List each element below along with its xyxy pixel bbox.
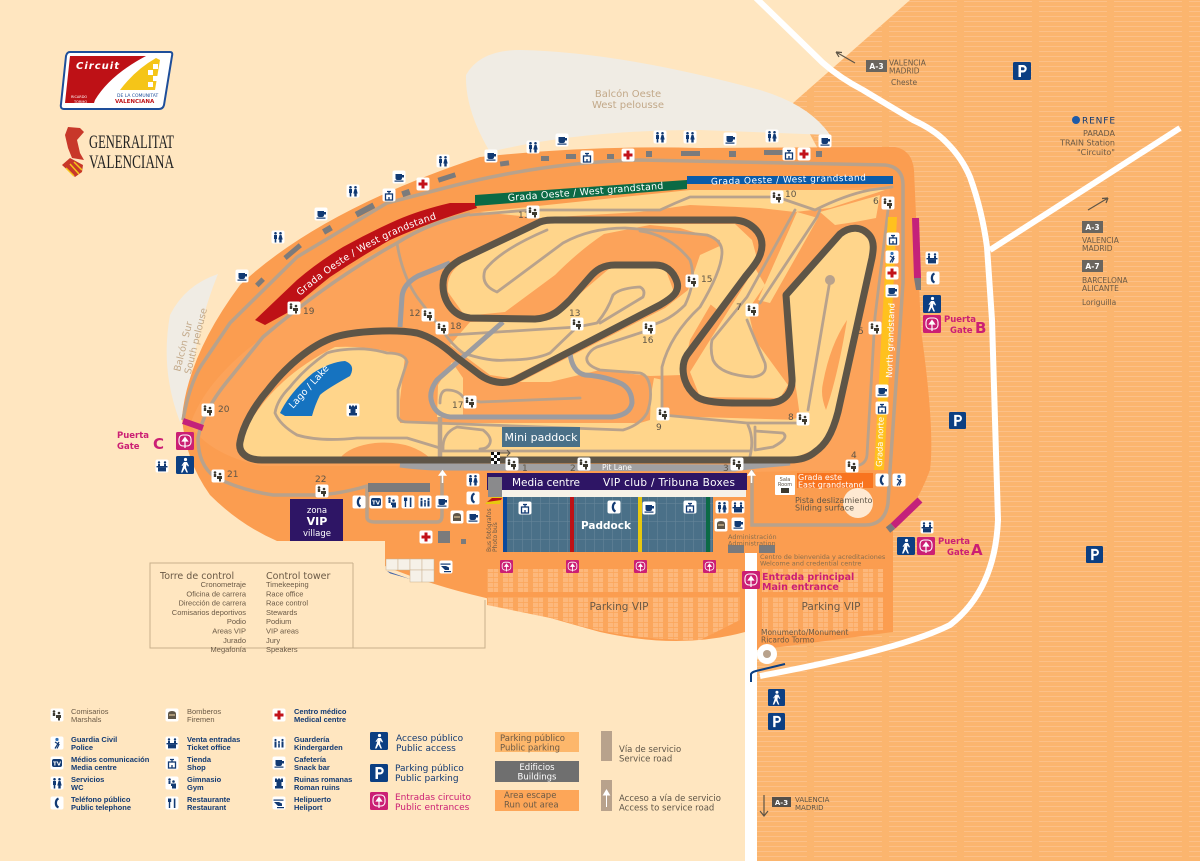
road: top inner road	[470, 187, 892, 215]
legend: small icons	[50, 707, 352, 812]
logo: Circuit de la Comunitat Valenciana: Circuit	[76, 61, 120, 72]
legend item: roman ruins: Roman ruins	[294, 783, 340, 792]
road: marshal 6	[855, 210, 888, 466]
logo: Circuit de la Comunitat Valenciana: TORMO	[73, 100, 87, 104]
legend item: medical: Centro médico	[294, 707, 347, 716]
legend item: kindergarten	[272, 735, 343, 752]
gate A bar	[888, 500, 920, 530]
grass: top straight strip	[640, 224, 758, 312]
legend item: kindergarten: Guardería	[294, 735, 330, 744]
grandstand: west green	[475, 180, 687, 206]
legend item: public parking	[370, 764, 464, 784]
heliport apron	[387, 571, 447, 606]
sign: RENFE station: "Circuito"	[1077, 148, 1115, 157]
panel: infield run-off base	[190, 186, 890, 472]
marshal post numbers: 22	[315, 475, 326, 485]
text: control tower list: Speakers	[266, 645, 298, 654]
text: control tower list: Stewards	[266, 608, 298, 617]
grass: diagonal strip	[758, 212, 818, 303]
gate A: A	[971, 541, 983, 559]
road: infield service roads	[275, 187, 892, 466]
flag: start finish	[491, 450, 510, 464]
pole: red paddock divider	[570, 497, 574, 552]
text: control tower list: Timekeeping	[266, 580, 309, 589]
legend item: marshals: Marshals	[71, 715, 102, 724]
label: mini paddock: Mini paddock	[505, 431, 578, 444]
label: lake: Lago / Lake	[287, 363, 332, 411]
icons: west perimeter services	[236, 130, 832, 282]
building: small squares at heliport	[386, 559, 434, 582]
text: torre de control list: Podio	[227, 617, 246, 626]
legend item: marshals	[50, 707, 109, 724]
label: monument: Monumento/Monument	[761, 628, 849, 637]
road: grey access roads	[400, 263, 632, 417]
text: torre de control list: Jurado	[223, 636, 246, 645]
arrow: pit service left	[440, 471, 446, 483]
sign: A-3 and A-7 destinations: MADRID	[1082, 244, 1113, 253]
legend item: roman ruins: Ruinas romanas	[294, 775, 352, 784]
sign: RENFE station: PARADA	[1083, 129, 1116, 138]
heading: control tower: Control tower	[266, 571, 331, 582]
legend item: snack bar: Snack bar	[294, 763, 330, 772]
zona VIP village	[290, 499, 343, 541]
road: bottom straight	[440, 450, 750, 452]
legend item: public access	[370, 732, 464, 754]
sign: A-3 and A-7 destinations: Loriguilla	[1082, 298, 1116, 307]
label: west grandstand: Grada Oeste / West grandstand	[297, 212, 436, 294]
lake	[280, 361, 352, 416]
text: control tower list: Jury	[266, 636, 280, 645]
sign: A-3 and A-7 destinations: BARCELONA	[1082, 276, 1129, 285]
road: bottom small loop	[443, 427, 490, 450]
grandstand: west red	[255, 203, 477, 325]
road: south ring road	[198, 214, 470, 522]
marshal post numbers	[218, 190, 879, 485]
gate C: Puerta	[117, 431, 149, 441]
zona VIP village: village	[303, 529, 331, 539]
grass: middle S area	[450, 268, 674, 378]
marshal post numbers: 9	[656, 423, 662, 433]
label: main entrance: Entrada principal	[762, 572, 854, 583]
marshal post numbers: 6	[873, 197, 879, 207]
legend: access types	[370, 732, 472, 813]
legend item: gym: Gimnasio	[187, 775, 222, 784]
logo: Generalitat Valenciana: GENERALITAT	[89, 132, 174, 153]
grass: east loop	[787, 228, 872, 457]
legend item: police	[50, 735, 117, 752]
legend item: run out	[495, 790, 579, 811]
sign: A-3 south: MADRID	[795, 804, 824, 812]
legend item: gym	[166, 775, 222, 792]
logo: Circuit de la Comunitat Valenciana: VALENCIANA	[115, 99, 155, 105]
road: upper loop inner	[484, 228, 722, 413]
heading: west pelouse: West pelousse	[592, 100, 664, 111]
legend item: shop: Tienda	[187, 755, 212, 764]
grass: upper loop	[448, 222, 655, 316]
legend: roads	[601, 731, 721, 814]
text: control tower list: Race office	[266, 589, 303, 598]
sign: A-3 south	[760, 795, 830, 816]
legend item: police: Police	[71, 743, 93, 752]
text: torre de control list: Areas VIP	[212, 626, 246, 636]
zona VIP village: VIP	[307, 515, 327, 528]
parking VIP east	[762, 569, 883, 635]
legend item: access to service road	[601, 780, 721, 814]
label: paddock: Paddock	[581, 520, 632, 532]
legend item: medical	[272, 707, 347, 724]
sign: A-3 Valencia Madrid Cheste: VALENCIA	[889, 58, 927, 68]
panel: infield grass	[241, 190, 885, 458]
paddock	[503, 497, 713, 552]
legend item: toilets: Servicios	[71, 775, 104, 784]
label: grada norte: Grada norte	[875, 417, 887, 467]
legend item: restaurant: Restaurant	[187, 803, 227, 812]
label: north grandstand: North grandstand	[885, 303, 898, 378]
road: main white road	[756, 0, 998, 676]
legend item: media	[50, 755, 150, 772]
label: welcome centre: Centro de bienvenida y acreditaciones	[760, 553, 886, 561]
legend item: telephone: Public telephone	[71, 803, 131, 812]
sliding surface	[795, 488, 873, 518]
icons: paddock services	[518, 500, 744, 532]
building: media and VIP bar	[487, 473, 747, 490]
logo: Generalitat Valenciana: VALENCIANA	[89, 152, 174, 173]
icons: marshal posts	[202, 190, 894, 498]
road: marshal 17 spur	[440, 390, 580, 403]
legend item: run out: Area escape	[504, 791, 556, 801]
marshal post numbers: 11	[518, 211, 529, 221]
sign: A-3 and A-7 destinations: ALICANTE	[1082, 284, 1119, 293]
legend item: shop: Shop	[187, 763, 206, 772]
building: control tower	[485, 477, 502, 504]
grandstand: north yellow	[874, 217, 898, 470]
marshal post numbers: 10	[785, 190, 797, 200]
legend item: service road: Service road	[619, 754, 672, 764]
marshal post numbers: 21	[227, 470, 238, 480]
legend item: restaurant: Restaurante	[187, 795, 230, 804]
pole: green paddock divider	[706, 497, 710, 552]
grass: under the S	[520, 245, 725, 382]
label: pit lane: Pit Lane	[602, 463, 632, 472]
heading: south pelouse: South pelouse	[183, 307, 210, 375]
legend item: ticket office: Venta entradas	[187, 735, 240, 744]
label: press bus: Bus fotógrafos	[486, 508, 493, 552]
building: admin bars	[728, 545, 775, 553]
grandstand: west blue	[687, 173, 893, 187]
monument circle	[757, 644, 777, 664]
sign: A-3 and A-7 destinations	[1082, 198, 1129, 307]
sign: A-3 and A-7 destinations: A-3	[1085, 223, 1100, 232]
label: administration: Administración	[728, 533, 777, 541]
icon: main entrance	[742, 571, 760, 589]
heading: torre de control: Torre de control	[159, 571, 234, 582]
grass: lake area and south band	[241, 347, 800, 458]
marshal post numbers: 5	[858, 327, 864, 337]
box: sala room: Sala	[780, 477, 790, 483]
legend item: buildings	[495, 761, 579, 782]
label: VIP club: VIP club / Tribuna Boxes	[603, 477, 735, 489]
legend item: restaurant	[166, 795, 230, 812]
legend item: police: Guardia Civil	[71, 735, 117, 744]
legend item: buildings: Edificios	[519, 763, 555, 773]
building: pit garages white strip	[502, 490, 746, 497]
grass: top band	[480, 190, 885, 218]
legend item: medical: Medical centre	[294, 715, 346, 724]
legend item: public access: Acceso público	[396, 734, 464, 744]
heading: south pelouse: Balcón Sur	[172, 320, 195, 373]
legend item: heliport	[272, 795, 332, 812]
marshal post numbers: 15	[701, 275, 712, 285]
legend item: snack bar: Cafetería	[294, 755, 327, 764]
text: torre de control list: Comisarios deportivos	[172, 608, 246, 617]
legend item: ticket office: Ticket office	[187, 743, 231, 752]
road: pit access vertical	[438, 417, 442, 466]
legend item: firemen: Firemen	[187, 715, 215, 724]
label: administration: Administration	[728, 540, 776, 548]
label: media centre: Media centre	[512, 477, 580, 489]
marshal post numbers: 16	[642, 336, 654, 346]
sign: A-3 Valencia Madrid Cheste: A-3	[869, 62, 884, 71]
label: press bus: Photo bus	[492, 522, 499, 552]
parking VIP west	[487, 569, 740, 640]
marshal post numbers: 19	[303, 307, 315, 317]
gate B	[923, 252, 986, 337]
road: turn seven inner	[711, 210, 820, 377]
panel: public parking area east	[757, 0, 1200, 861]
gate C: C	[153, 435, 164, 453]
legend item: public entrances: Public entrances	[395, 803, 470, 813]
marshal post numbers: 8	[788, 413, 794, 423]
text: control tower list: Race control	[266, 599, 308, 608]
arrow: access road	[751, 664, 785, 682]
grandstand: east orange	[797, 473, 873, 490]
marshal post numbers: 3	[723, 464, 729, 474]
icons: public parking markers	[949, 62, 1103, 563]
legend item: access to service road: Acceso a vía de servicio	[619, 794, 721, 804]
road: small hairpin	[577, 287, 644, 327]
legend item: snack bar	[272, 755, 330, 772]
road: lower S	[397, 243, 577, 360]
text: torre de control list: Cronometraje	[201, 580, 246, 589]
sign: RENFE station: RENFE	[1082, 116, 1115, 126]
legend item: gym: Gym	[187, 783, 204, 792]
road: round loop at fifteen	[640, 231, 693, 325]
gate B: Puerta	[944, 315, 976, 325]
outbuildings along west perimeter	[255, 150, 822, 287]
legend item: roman ruins	[272, 775, 352, 792]
text: torre de control list: Oficina de carrera	[186, 589, 247, 598]
label: sliding surface: Sliding surface	[795, 504, 854, 512]
legend item: public entrances	[370, 792, 472, 813]
marshal post numbers: 13	[569, 309, 580, 319]
label: monument: Ricardo Tormo	[761, 636, 815, 644]
gate A	[897, 520, 983, 559]
gate B: B	[975, 319, 986, 337]
legend item: access to service road: Access to service road	[619, 804, 714, 814]
road: lake loop	[275, 349, 440, 448]
legend item: firemen	[166, 707, 221, 724]
grass: loop around seventeen	[437, 362, 463, 417]
panel: west pelouse	[466, 50, 830, 152]
gate B bar	[912, 218, 921, 290]
icons: access south	[768, 689, 785, 730]
icons: VIP parking entrances	[500, 560, 716, 573]
sign: A-3 Valencia Madrid Cheste: Cheste	[891, 78, 917, 87]
legend item: run out: Run out area	[504, 800, 559, 810]
gate C	[117, 431, 194, 474]
label: welcome centre: Welcome and credential centre	[760, 560, 861, 568]
legend item: parking area: Public parking	[500, 744, 560, 754]
legend item: heliport: Heliport	[294, 803, 323, 812]
sign: A-3 and A-7 destinations: VALENCIA	[1082, 236, 1120, 245]
legend item: firemen: Bomberos	[187, 707, 221, 716]
road: outer service road	[183, 160, 903, 525]
label: west grandstand blue: Grada Oeste / West grandstand	[711, 173, 866, 187]
legend item: telephone: Teléfono público	[71, 795, 131, 804]
legend item: media: Médios comunicación	[71, 755, 150, 764]
legend item: service road	[601, 731, 681, 764]
gate A: Puerta	[938, 537, 970, 547]
logo: Circuit de la Comunitat Valenciana	[61, 52, 172, 109]
legend item: parking area	[495, 732, 579, 754]
track: pit lane	[400, 462, 790, 468]
legend item: toilets	[50, 775, 104, 792]
road: east branch	[990, 128, 1180, 250]
box: sala room	[775, 475, 795, 495]
marshal post numbers: 4	[851, 451, 857, 461]
grass: north top patch	[820, 195, 880, 225]
text: torre de control list: Dirección de carrera	[178, 599, 247, 608]
sign: RENFE station	[1059, 116, 1116, 157]
icon: roman ruins	[346, 404, 360, 416]
sign: A-3 south: VALENCIA	[795, 796, 830, 804]
legend item: marshals: Comisarios	[71, 707, 109, 716]
arrow: pit service right	[748, 471, 754, 483]
label: parking VIP: Parking VIP	[802, 601, 860, 613]
legend item: public parking: Public parking	[395, 774, 459, 784]
track: racing circuit	[240, 220, 873, 460]
legend item: media: Media centre	[71, 763, 117, 772]
zona VIP village: zona	[307, 506, 327, 516]
building: grey medical blocks	[438, 531, 466, 544]
legend item: telephone	[50, 795, 131, 812]
gate C bar	[183, 421, 203, 428]
gate C: Gate	[117, 442, 140, 452]
legend: area swatches	[495, 732, 579, 811]
label: east grandstand: Grada este	[798, 473, 842, 482]
panel: control tower info	[150, 563, 485, 654]
legend item: ticket office	[166, 735, 240, 752]
marshal post numbers: 12	[409, 309, 420, 319]
legend item: heliport: Helipuerto	[294, 795, 332, 804]
gate B: Gate	[950, 326, 973, 336]
label: east grandstand: East grandstand	[798, 480, 864, 490]
label: west grandstand green: Grada Oeste / West grandstand	[507, 181, 664, 204]
label: parking VIP: Parking VIP	[590, 601, 648, 613]
heading: west pelouse: Balcón Oeste	[595, 88, 661, 100]
logo: Generalitat Valenciana	[62, 127, 174, 177]
label: main entrance: Main entrance	[762, 582, 839, 593]
text: control tower list: VIP areas	[266, 626, 299, 636]
legend item: kindergarten: Kindergarden	[294, 743, 343, 752]
text: torre de control list: Megafonía	[211, 645, 247, 654]
road: end of skid pan	[808, 280, 830, 410]
icons: VIP village services	[352, 474, 480, 574]
building: grey block at village	[368, 483, 430, 492]
sign: A-3 Valencia Madrid Cheste: MADRID	[889, 66, 920, 76]
sign: A-3 Valencia Madrid Cheste	[866, 58, 927, 87]
sign: RENFE station: TRAIN Station	[1059, 138, 1115, 148]
marshal post numbers: 1	[522, 464, 528, 474]
box: sala room: Room	[778, 482, 792, 488]
panel: east loop run-off patch	[822, 320, 847, 410]
logo: Circuit de la Comunitat Valenciana: DE LA COMUNITAT	[117, 93, 159, 99]
legend item: toilets: WC	[71, 783, 84, 792]
grass: inside turn seven	[690, 268, 788, 398]
panel: south pelouse	[167, 274, 218, 422]
road: lower right link	[663, 415, 803, 460]
pole: yellow paddock divider	[638, 497, 642, 552]
marshal post numbers: 20	[218, 405, 230, 415]
sign: A-3 south: A-3	[775, 799, 788, 807]
label: mini paddock	[502, 427, 580, 447]
label: sliding surface: Pista deslizamiento	[795, 496, 872, 505]
gate A: Gate	[947, 548, 970, 558]
arrow: to Cheste	[836, 52, 855, 63]
marshal post numbers: 18	[450, 322, 462, 332]
legend item: public entrances: Entradas circuito	[395, 793, 472, 803]
legend item: service road: Vía de servicio	[619, 745, 681, 755]
road: west infield link	[398, 330, 651, 430]
panel: circuit grounds	[182, 147, 931, 650]
circle: skid pan end	[825, 275, 835, 285]
marshal post numbers: 17	[452, 401, 463, 411]
icons: east grandstand services	[876, 232, 906, 486]
legend item: buildings: Buildings	[518, 772, 557, 782]
marshal post numbers: 7	[736, 303, 742, 313]
sign: A-3 and A-7 destinations: A-7	[1085, 262, 1100, 271]
legend item: public access: Public access	[396, 744, 456, 754]
road: main entrance avenue	[745, 553, 757, 861]
pole: blue paddock divider	[503, 497, 507, 552]
legend item: shop	[166, 755, 212, 772]
logo: Circuit de la Comunitat Valenciana: RICARDO	[71, 95, 87, 99]
legend item: parking area: Parking público	[500, 734, 565, 744]
text: control tower list: Podium	[266, 617, 291, 626]
marshal post numbers: 2	[570, 464, 576, 474]
legend item: public parking: Parking público	[395, 764, 464, 774]
